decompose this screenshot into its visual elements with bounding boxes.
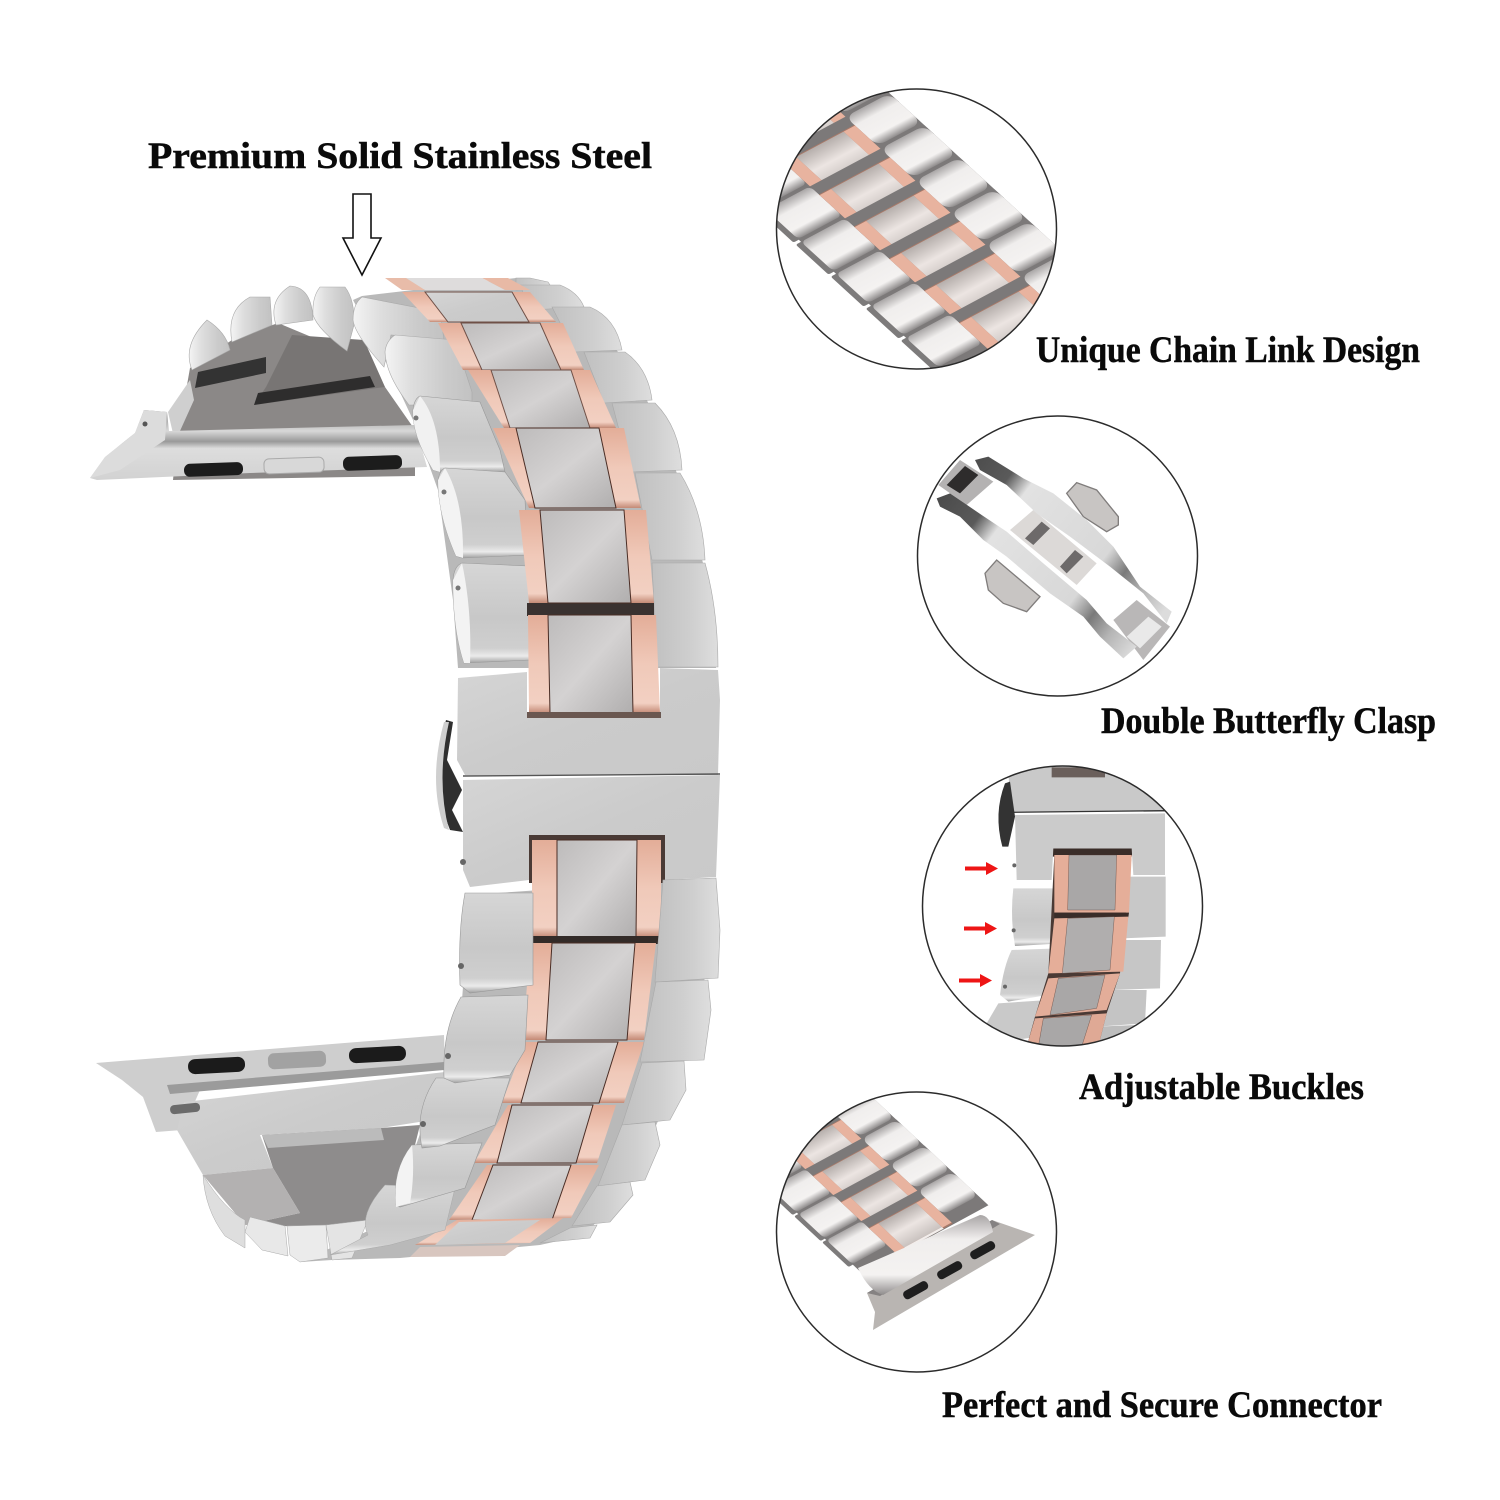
upper watch connector	[90, 410, 427, 480]
lower notch shadow	[529, 835, 665, 883]
upper notch shadow	[527, 712, 661, 718]
lower right side links	[540, 878, 720, 1243]
panel: unique chain link design	[776, 88, 1058, 370]
panel: adjustable buckles	[922, 766, 1202, 1047]
right side links	[516, 278, 718, 667]
circle outline	[918, 416, 1198, 696]
butterfly clasp hinge	[436, 720, 463, 832]
chain link close-up	[777, 92, 1055, 368]
lower center links with rose gold trim	[410, 840, 662, 1257]
upper end tip links	[189, 286, 472, 405]
panel: perfect and secure connector	[776, 1091, 1058, 1373]
infographic canvas	[90, 88, 1435, 1418]
lower left side links	[203, 893, 533, 1262]
panel: main watch band	[90, 278, 720, 1262]
lower watch connector	[96, 1035, 445, 1228]
panel: double butterfly clasp	[918, 416, 1198, 696]
buckle close-up	[987, 767, 1166, 1047]
label: perfect and secure connector: Perfect and Secure Connector	[942, 1385, 1382, 1426]
red arrows marking adjustment points	[959, 862, 998, 987]
connector close-up	[780, 1099, 1035, 1330]
arrow: pointing down to band	[343, 194, 381, 275]
label: unique chain link design: Unique Chain Link Design	[1036, 330, 1420, 371]
circle outline	[776, 1092, 1056, 1372]
title: premium solid stainless steel: Premium Solid Stainless Steel	[148, 136, 652, 177]
butterfly clasp close-up	[937, 457, 1172, 660]
band backing silhouette	[353, 278, 716, 668]
label: double butterfly clasp: Double Butterfly Clasp	[1101, 701, 1436, 742]
lower band backing silhouette	[300, 878, 710, 1262]
inner underside of band	[168, 323, 415, 480]
left side links	[413, 396, 530, 663]
circle outline	[922, 766, 1202, 1046]
upper clasp plate	[457, 668, 720, 775]
label: adjustable buckles: Adjustable Buckles	[1079, 1067, 1364, 1108]
center links with rose gold trim	[385, 278, 660, 713]
circle outline	[776, 89, 1056, 369]
lower clasp plate	[463, 775, 720, 887]
